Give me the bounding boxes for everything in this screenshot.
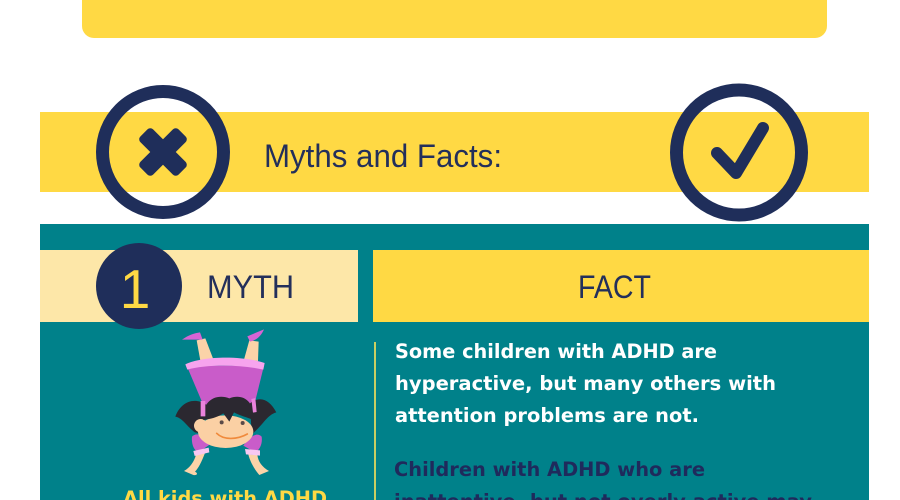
panel: myth and fact: [40, 224, 869, 500]
section heading band: [40, 112, 869, 192]
icon: cross in circle: [102, 92, 224, 212]
myth header: [40, 250, 358, 322]
fact text: white paragraph: [395, 340, 776, 427]
divider line: [374, 342, 376, 500]
fact text: white paragraph: Some children with ADHD are: [395, 340, 717, 363]
fact text: white paragraph: hyperactive, but many others with: [395, 372, 776, 395]
fact text: navy paragraph: Children with ADHD who are: [394, 458, 705, 481]
myth header: MYTH: [207, 269, 294, 305]
fact header: FACT: [578, 269, 651, 305]
number badge: [96, 243, 182, 329]
icon: check mark in circle: [676, 90, 802, 215]
fact text: white paragraph: attention problems are not.: [395, 404, 699, 427]
illustration: girl doing a handstand: [175, 329, 276, 475]
fact header: [373, 250, 869, 322]
top yellow banner: [82, 0, 827, 38]
heading: Myths and Facts: Myths and Facts:: [264, 138, 502, 174]
fact text: navy paragraph: [394, 458, 812, 500]
number badge: 1: [120, 258, 150, 320]
